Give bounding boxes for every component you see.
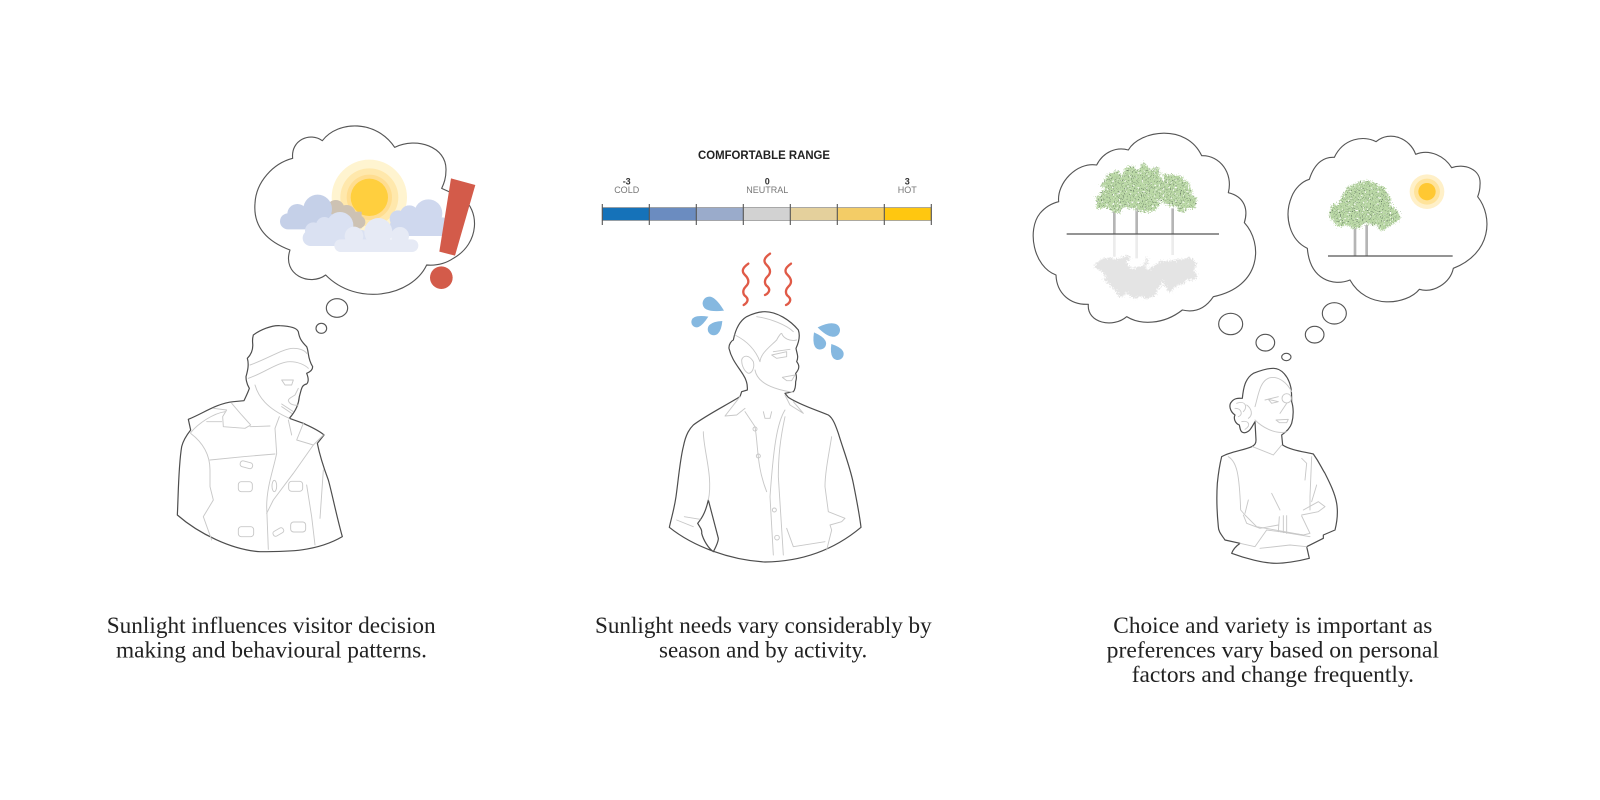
panel: seasonal needs	[595, 150, 932, 663]
caption: Sunlight needs vary considerably by	[595, 613, 932, 639]
ground line	[1328, 254, 1453, 258]
caption: preferences vary based on personal	[1107, 637, 1439, 663]
cloud: back right	[390, 199, 450, 236]
thought bubbles	[316, 299, 348, 333]
cloud: middle	[303, 212, 369, 246]
caption: Choice and variety is important as	[1113, 613, 1432, 639]
caption	[595, 613, 932, 663]
caption: Sunlight influences visitor decision	[107, 613, 436, 639]
caption	[1107, 613, 1439, 688]
person in winter coat	[177, 326, 342, 552]
icon: small sun	[1410, 174, 1444, 209]
caption: factors and change frequently.	[1132, 662, 1414, 688]
scale end labels: -3	[623, 176, 631, 186]
person with arms crossed	[1217, 368, 1337, 563]
figure details	[191, 348, 323, 549]
thought bubbles	[1219, 303, 1346, 361]
person in shirt with sweat drops	[669, 297, 861, 562]
caption	[107, 613, 436, 663]
scale end labels	[614, 176, 917, 195]
ground line	[1067, 232, 1219, 236]
thought cloud: shaded trees	[1033, 133, 1256, 323]
thought cloud outline	[255, 126, 475, 294]
caption: making and behavioural patterns.	[116, 637, 427, 663]
caption: season and by activity.	[659, 637, 867, 663]
cloud: front	[334, 218, 418, 252]
tree shadow	[1095, 234, 1197, 300]
scale title: COMFORTABLE RANGE	[698, 150, 830, 162]
trees: group of three	[1095, 166, 1197, 234]
thought bubble with weather	[255, 126, 475, 333]
panel: choice and variety	[1033, 133, 1487, 688]
scale end labels: 0	[765, 176, 770, 186]
scale end labels: 3	[905, 176, 910, 186]
cloud: back left	[280, 195, 365, 229]
thought cloud: sunny tree	[1288, 136, 1487, 302]
scale end labels: COLD	[614, 185, 640, 195]
figure outline	[1217, 368, 1337, 563]
icon: heat waves	[743, 254, 791, 305]
icon: exclamation mark	[430, 178, 475, 289]
colour bar	[602, 204, 931, 225]
tree: large single	[1327, 181, 1400, 256]
figure outline	[669, 312, 861, 562]
figure details	[1228, 377, 1325, 548]
figure outline	[177, 326, 342, 552]
figure details	[677, 317, 845, 555]
sun	[332, 160, 407, 235]
thought bubbles with trees	[1033, 133, 1487, 361]
comfort scale	[602, 150, 931, 225]
icon: sweat drops	[691, 297, 844, 360]
scale end labels: NEUTRAL	[746, 185, 788, 195]
panel: decision making	[107, 126, 475, 663]
scale end labels: HOT	[898, 185, 917, 195]
